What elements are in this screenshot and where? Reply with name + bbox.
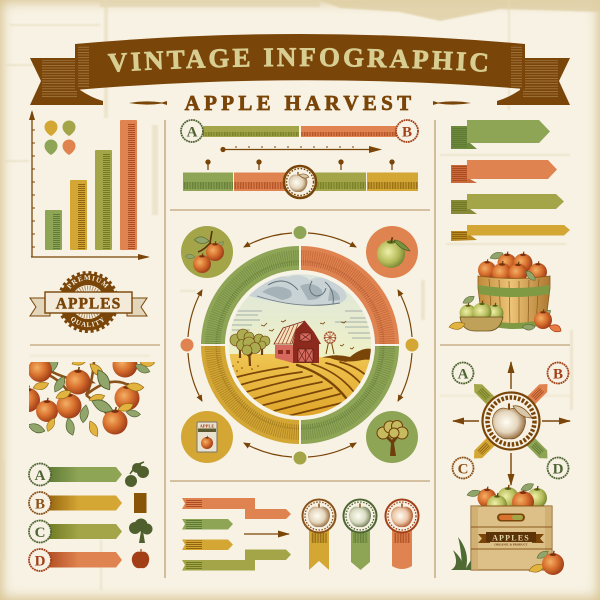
central ring	[201, 246, 399, 444]
ribbon 1	[451, 120, 550, 149]
title text: VINTAGE INFOGRAPHIC	[108, 48, 488, 72]
ribbon 2	[451, 160, 557, 183]
row A: A	[35, 468, 46, 484]
ribbon medals	[302, 500, 418, 570]
orange stepped banner	[182, 498, 291, 519]
compass diagram	[452, 362, 570, 485]
icon: green apple	[366, 226, 418, 278]
barn	[274, 321, 321, 363]
diagonal arrow B	[527, 380, 551, 405]
subtitle: APPLE HARVEST	[185, 91, 415, 115]
apple crate	[451, 482, 564, 575]
cycle arrows	[188, 233, 412, 457]
small arrow	[244, 533, 289, 535]
orange medal	[386, 500, 418, 569]
farm scene	[229, 274, 371, 416]
A-B comparison bar: A	[187, 124, 198, 140]
diagonal arrow C	[470, 438, 495, 462]
birds	[261, 320, 354, 349]
ribbon 4	[451, 225, 570, 241]
premium apples seal: PREMIUM	[66, 275, 109, 290]
compass arrows	[453, 362, 570, 485]
segmented bar	[183, 160, 418, 198]
A-B comparison bar	[181, 120, 418, 142]
apple basket	[449, 252, 561, 332]
green medal	[344, 500, 376, 570]
compass badge	[482, 392, 540, 450]
yellow medal	[302, 500, 336, 570]
compass label A: A	[458, 366, 469, 382]
cycle dots	[180, 226, 418, 464]
legend rows A-D	[29, 462, 152, 571]
row D: D	[35, 554, 46, 570]
apple branch illustration	[29, 362, 155, 437]
premium apples seal: QUALITY	[71, 316, 104, 328]
apple crate: ORGANIC & PRODUCT	[494, 542, 528, 546]
bottom banners	[182, 498, 291, 570]
compass label B: B	[553, 366, 563, 382]
compass label D: D	[553, 462, 564, 478]
apple medal	[284, 166, 316, 198]
icon: apples on branch	[181, 226, 233, 278]
premium apples seal	[29, 271, 148, 333]
dividers	[30, 120, 570, 578]
cloud	[249, 275, 347, 305]
icon: apple juice can	[181, 411, 233, 463]
timeline arrow	[220, 146, 382, 153]
fields	[230, 354, 370, 416]
map pins	[44, 120, 76, 155]
seal label: APPLES	[56, 296, 121, 312]
apple trees	[230, 329, 270, 366]
row B: B	[35, 496, 45, 512]
subtitle	[129, 91, 471, 115]
olive stepped banner	[182, 550, 291, 570]
diagonal arrow A	[470, 380, 495, 405]
icon: apple juice can: APPLE	[200, 424, 214, 428]
row C: C	[35, 525, 45, 541]
grass	[451, 537, 471, 570]
top right ribbons	[451, 120, 570, 241]
tree line hill	[322, 348, 371, 363]
green arrow banner	[182, 519, 233, 530]
ribbon 3	[451, 194, 564, 214]
yellow arrow banner	[182, 540, 233, 550]
diagonal arrow D	[527, 438, 551, 462]
bar chart	[29, 110, 150, 260]
A-B comparison bar: B	[402, 124, 412, 140]
title banner	[30, 34, 570, 105]
icon: apple tree	[366, 411, 418, 463]
compass label C: C	[458, 462, 468, 478]
crate label: APPLES	[492, 534, 530, 542]
windmill	[324, 332, 336, 354]
